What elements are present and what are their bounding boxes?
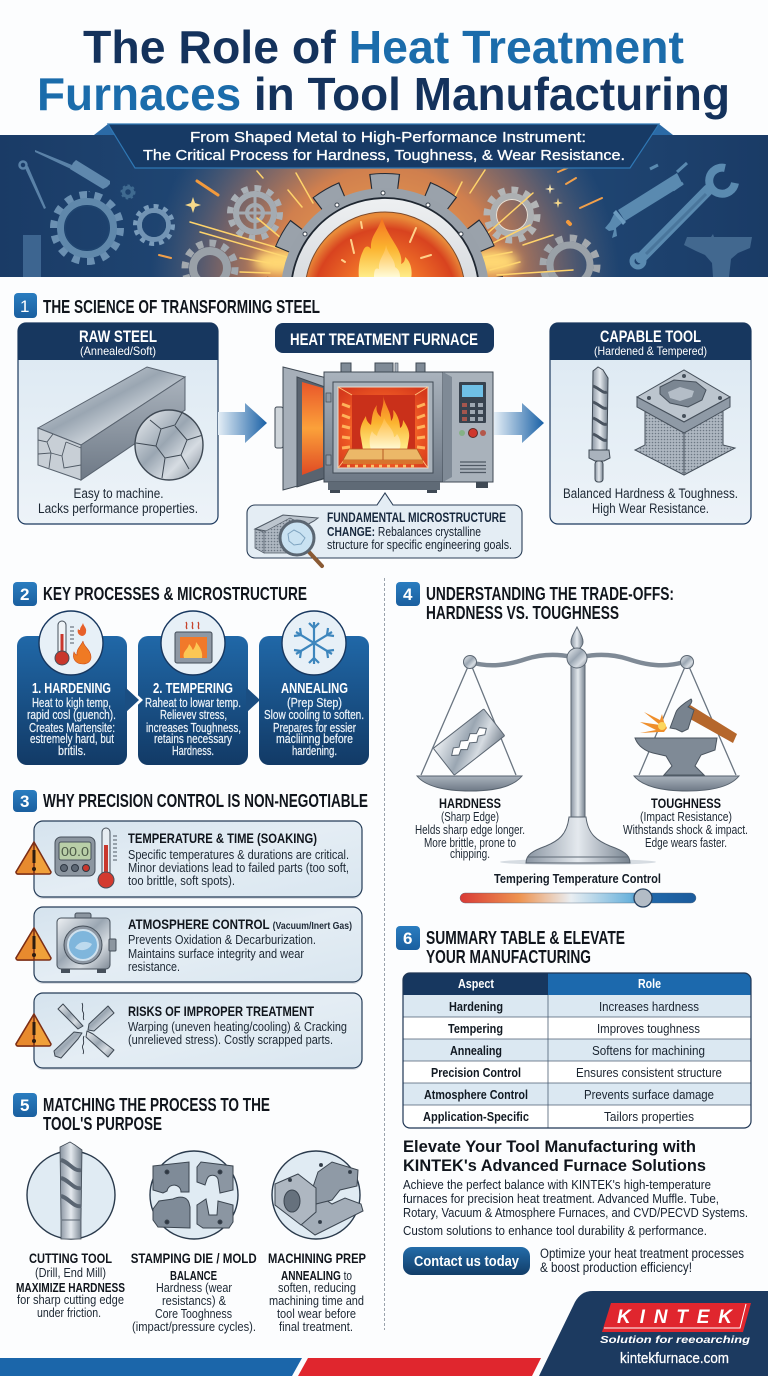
panel: atmosphere control: ATMOSPHERE CONTROL (Vacuum/Inert Gas) bbox=[128, 916, 352, 932]
section 6 heading bbox=[396, 926, 625, 967]
column: machining prep: machining time and bbox=[269, 1294, 364, 1308]
hero banner bbox=[0, 135, 768, 277]
panel: hardening card bbox=[17, 611, 139, 765]
panel: atmosphere control: Maintains surface integrity and wear bbox=[128, 947, 304, 961]
column: stamping die: Hardness (wear bbox=[156, 1281, 232, 1295]
panel: temperature and time: TEMPERATURE & TIME (SOAKING) bbox=[128, 830, 317, 846]
column: stamping die: Core Tooghness bbox=[155, 1307, 232, 1321]
footer logo panel: kintekfurnace.com bbox=[620, 1351, 729, 1367]
panel: raw steel: RAW STEEL bbox=[79, 327, 157, 346]
section 5 heading bbox=[13, 1093, 270, 1134]
section 3 heading: 3 bbox=[20, 792, 29, 811]
section 2 heading: 2 bbox=[20, 585, 29, 604]
panel: raw steel: Lacks performance properties. bbox=[38, 501, 198, 516]
column: cutting tool: MAXIMIZE HARDNESS bbox=[16, 1281, 125, 1295]
panel: annealing card: Prepares for essier bbox=[273, 721, 356, 735]
call to action text: furnaces for precision heat treatment. Advanced Muffle. Tube, bbox=[403, 1191, 719, 1206]
call to action text: Custom solutions to enhance tool durability & performance. bbox=[403, 1223, 707, 1238]
text: optimize bbox=[540, 1246, 744, 1275]
summary table: Increases hardness bbox=[599, 1000, 699, 1014]
summary table: Aspect bbox=[458, 976, 495, 991]
section 3 heading: WHY PRECISION CONTROL IS NON-NEGOTIABLE bbox=[43, 791, 368, 811]
icon: machined part bbox=[272, 1151, 363, 1239]
summary table: Atmosphere Control bbox=[424, 1088, 528, 1102]
panel: capable tool: CAPABLE TOOL bbox=[600, 327, 701, 346]
glow behind gear bbox=[160, 168, 610, 277]
icon: timer: 00.0 bbox=[61, 844, 89, 859]
arrow: furnace to capable tool bbox=[494, 403, 544, 443]
logo: KINTEK bbox=[602, 1303, 751, 1332]
icon: timer bbox=[55, 837, 95, 876]
panel: risks of improper treatment: RISKS OF IMPROPER TREATMENT bbox=[128, 1003, 314, 1019]
panel: temperature and time: Specific temperatures & durations are critical. bbox=[128, 848, 349, 862]
text: hardness: More brittle, prone to bbox=[424, 836, 516, 850]
left tools bbox=[20, 150, 110, 277]
text: hardness: HARDNESS bbox=[439, 795, 501, 811]
icon: magnifier on steel block bbox=[255, 515, 322, 566]
summary table: Ensures consistent structure bbox=[576, 1066, 722, 1080]
panel: annealing card: hardening. bbox=[292, 744, 337, 758]
panel: atmosphere control bbox=[16, 907, 362, 984]
icon: grain circle bbox=[135, 410, 203, 480]
icon: drill bbox=[27, 1142, 115, 1239]
panel: atmosphere control: resistance. bbox=[128, 960, 180, 974]
section 1 heading: 1 bbox=[20, 297, 29, 316]
icon: steel bar bbox=[38, 367, 185, 480]
icon: cracked tool bbox=[54, 1003, 114, 1058]
icon: hammer and spark bbox=[640, 699, 737, 743]
panel: hardening card: rapid cosl (guench). bbox=[27, 708, 116, 722]
panel: tempering card: Hardness. bbox=[172, 744, 214, 758]
column: cutting tool: CUTTING TOOL bbox=[29, 1250, 112, 1266]
icon: furnace bbox=[275, 363, 493, 493]
icon: hardened die bbox=[635, 370, 735, 475]
button: contact us today bbox=[403, 1247, 530, 1275]
panel: capable tool: High Wear Resistance. bbox=[592, 501, 709, 516]
left gears bbox=[50, 184, 600, 277]
icon: vacuum chamber bbox=[57, 913, 116, 973]
section 6 heading: SUMMARY TABLE & ELEVATE bbox=[426, 928, 625, 948]
text: hardness: chipping. bbox=[450, 847, 490, 861]
text: hardness: (Sharp Edge) bbox=[441, 810, 499, 824]
panel: annealing card: (Prep Step) bbox=[287, 696, 342, 710]
panel: hardening card: estremely hard, but bbox=[30, 732, 114, 746]
text: optimize: & boost production efficiency! bbox=[540, 1260, 692, 1275]
column: stamping die: (impact/pressure cycles). bbox=[132, 1320, 256, 1334]
summary table: Improves toughness bbox=[597, 1022, 700, 1036]
panel: temperature and time: too brittle, soft spots). bbox=[128, 874, 235, 888]
slider: tempering temperature control bbox=[460, 871, 696, 907]
text: toughness: (Impact Resistance) bbox=[640, 810, 732, 824]
column: stamping die: STAMPING DIE / MOLD bbox=[131, 1250, 257, 1266]
section 5 heading: MATCHING THE PROCESS TO THE bbox=[43, 1095, 270, 1115]
section 4 heading bbox=[396, 582, 674, 623]
text: hardness bbox=[415, 795, 525, 861]
furnace title bbox=[275, 323, 494, 353]
panel: raw steel: Easy to machine. bbox=[74, 486, 164, 501]
section 2 heading bbox=[13, 582, 307, 606]
summary table: Role bbox=[638, 976, 661, 991]
column: machining prep: final treatment. bbox=[279, 1320, 353, 1334]
panel: capable tool: Balanced Hardness & Toughness. bbox=[563, 486, 738, 501]
text: toughness: Edge wears faster. bbox=[645, 836, 727, 850]
button: contact us today: Contact us today bbox=[414, 1254, 519, 1270]
icon: anvil bbox=[635, 738, 717, 775]
panel: atmosphere control: Prevents Oxidation & Decarburization. bbox=[128, 933, 316, 947]
panel: risks of improper treatment bbox=[16, 993, 362, 1070]
call to action text bbox=[403, 1137, 748, 1238]
summary table: Precision Control bbox=[431, 1066, 521, 1080]
panel: annealing card: macliinng before bbox=[276, 732, 353, 746]
central gear bbox=[267, 173, 503, 277]
summary table: Tempering bbox=[448, 1022, 503, 1036]
summary table: Tailors properties bbox=[604, 1110, 694, 1124]
column: cutting tool: for sharp cutting edge bbox=[17, 1293, 124, 1307]
summary table: Application-Specific bbox=[423, 1110, 529, 1124]
icon: warning bbox=[16, 928, 51, 960]
callout: microstructure change: FUNDAMENTAL MICROSTRUCTURE bbox=[327, 510, 506, 525]
call to action text: Elevate Your Tool Manufacturing with bbox=[403, 1137, 696, 1156]
panel: tempering card: increases Toughness, bbox=[146, 721, 241, 735]
panel: raw steel bbox=[18, 323, 218, 524]
callout: microstructure change: structure for specific engineering goals. bbox=[327, 537, 512, 552]
column: machining prep: soften, reducing bbox=[278, 1281, 356, 1295]
icon: die halves bbox=[150, 1151, 238, 1239]
panel: annealing card: ANNEALING bbox=[281, 680, 348, 697]
subtitle ribbon: From Shaped Metal to High-Performance Instrument: bbox=[190, 129, 586, 146]
section 5 heading: TOOL'S PURPOSE bbox=[43, 1114, 162, 1134]
section 6 heading: 6 bbox=[403, 929, 412, 948]
icon: thermometer bbox=[98, 828, 117, 888]
column: stamping die bbox=[131, 1151, 257, 1334]
icon: tempering oven bbox=[161, 611, 225, 675]
column: cutting tool: (Drill, End Mill) bbox=[35, 1266, 106, 1280]
icon: razor blade bbox=[433, 709, 505, 775]
call to action text: KINTEK's Advanced Furnace Solutions bbox=[403, 1156, 706, 1175]
panel: temperature and time bbox=[16, 821, 362, 899]
icon: warning bbox=[16, 842, 51, 874]
panel: temperature and time: Minor deviations lead to failed parts (too soft, bbox=[128, 861, 349, 875]
column: cutting tool: under friction. bbox=[37, 1306, 101, 1320]
subtitle ribbon: The Critical Process for Hardness, Toughness, & Wear Resistance. bbox=[143, 147, 625, 164]
panel: tempering card: Relievev stress, bbox=[160, 708, 227, 722]
section 4 heading: HARDNESS VS. TOUGHNESS bbox=[426, 603, 619, 623]
section 3 heading bbox=[13, 790, 368, 812]
panel: tempering card: Raheat to lowar temp. bbox=[145, 696, 241, 710]
panel: capable tool: (Hardened & Tempered) bbox=[594, 344, 707, 358]
icon: drill bit bbox=[589, 367, 610, 482]
section 5 heading: 5 bbox=[20, 1096, 29, 1115]
summary table bbox=[403, 973, 751, 1128]
slider: tempering temperature control: Tempering Temperature Control bbox=[494, 871, 661, 886]
section 6 heading: YOUR MANUFACTURING bbox=[426, 947, 591, 967]
text: toughness: TOUGHNESS bbox=[651, 795, 721, 811]
footer logo panel bbox=[539, 1291, 768, 1376]
column: cutting tool bbox=[16, 1142, 125, 1320]
panel: annealing card: Slow cooling to soften. bbox=[264, 708, 364, 722]
panel: annealing card bbox=[259, 611, 369, 765]
section 4 heading: UNDERSTANDING THE TRADE-OFFS: bbox=[426, 584, 674, 604]
panel: tempering card: 2. TEMPERING bbox=[153, 680, 233, 697]
summary table: Prevents surface damage bbox=[584, 1088, 714, 1102]
icon: snowflake bbox=[282, 611, 346, 675]
column: machining prep: tool wear before bbox=[277, 1307, 356, 1321]
summary table: Annealing bbox=[450, 1044, 502, 1058]
callout: microstructure change: CHANGE: Rebalances crystalline bbox=[327, 524, 481, 539]
panel: capable tool bbox=[550, 323, 751, 524]
section 1 heading bbox=[14, 293, 320, 318]
title: Furnaces in Tool Manufacturing bbox=[37, 68, 730, 120]
footer bars bbox=[0, 1358, 541, 1376]
panel: tempering card: retains necessary bbox=[154, 732, 233, 746]
panel: hardening card: Heat to kigh temp, bbox=[32, 696, 111, 710]
furnace title: HEAT TREATMENT FURNACE bbox=[290, 330, 478, 349]
sparks bbox=[159, 166, 602, 275]
panel: risks of improper treatment: (unrelieved stress). Costly scrapped parts. bbox=[128, 1033, 333, 1047]
section 4 heading: 4 bbox=[403, 585, 413, 604]
summary table: Softens for machining bbox=[592, 1044, 705, 1058]
text: hardness: Helds sharp edge longer. bbox=[415, 823, 525, 837]
panel: risks of improper treatment: Warping (uneven heating/cooling) & Cracking bbox=[128, 1020, 347, 1034]
column: machining prep bbox=[268, 1151, 366, 1334]
title bbox=[37, 21, 730, 120]
icon: warning bbox=[16, 1014, 51, 1046]
panel: hardening card: 1. HARDENING bbox=[32, 680, 111, 697]
section 1 heading: THE SCIENCE OF TRANSFORMING STEEL bbox=[43, 297, 320, 317]
panel: hardening card: Creates Martensite: bbox=[29, 721, 115, 735]
arrow: raw steel to furnace bbox=[218, 403, 267, 443]
call to action text: Achieve the perfect balance with KINTEK's high-temperature bbox=[403, 1177, 711, 1192]
column: stamping die: BALANCE bbox=[170, 1269, 217, 1283]
summary table: Hardening bbox=[449, 1000, 503, 1014]
panel: hardening card: britils. bbox=[58, 744, 86, 758]
section 2 heading: KEY PROCESSES & MICROSTRUCTURE bbox=[43, 584, 307, 604]
blurred hot spots bbox=[254, 250, 518, 274]
text: toughness bbox=[623, 795, 748, 850]
column: stamping die: resistancs) & bbox=[162, 1294, 227, 1308]
right tools bbox=[605, 163, 752, 277]
callout: microstructure change bbox=[247, 493, 522, 566]
column: machining prep: ANNEALING to bbox=[281, 1269, 352, 1283]
icon: thermometer and flame bbox=[39, 611, 103, 675]
footer logo panel: Solution for reeoarching bbox=[600, 1334, 751, 1346]
panel: raw steel: (Annealed/Soft) bbox=[80, 344, 156, 358]
title: The Role of Heat Treatment bbox=[83, 21, 684, 73]
column: machining prep: MACHINING PREP bbox=[268, 1250, 366, 1266]
logo: KINTEK: KINTEK bbox=[617, 1307, 733, 1328]
panel: tempering card bbox=[125, 611, 260, 765]
chart: balance scale bbox=[417, 627, 739, 865]
subtitle ribbon bbox=[94, 124, 673, 168]
